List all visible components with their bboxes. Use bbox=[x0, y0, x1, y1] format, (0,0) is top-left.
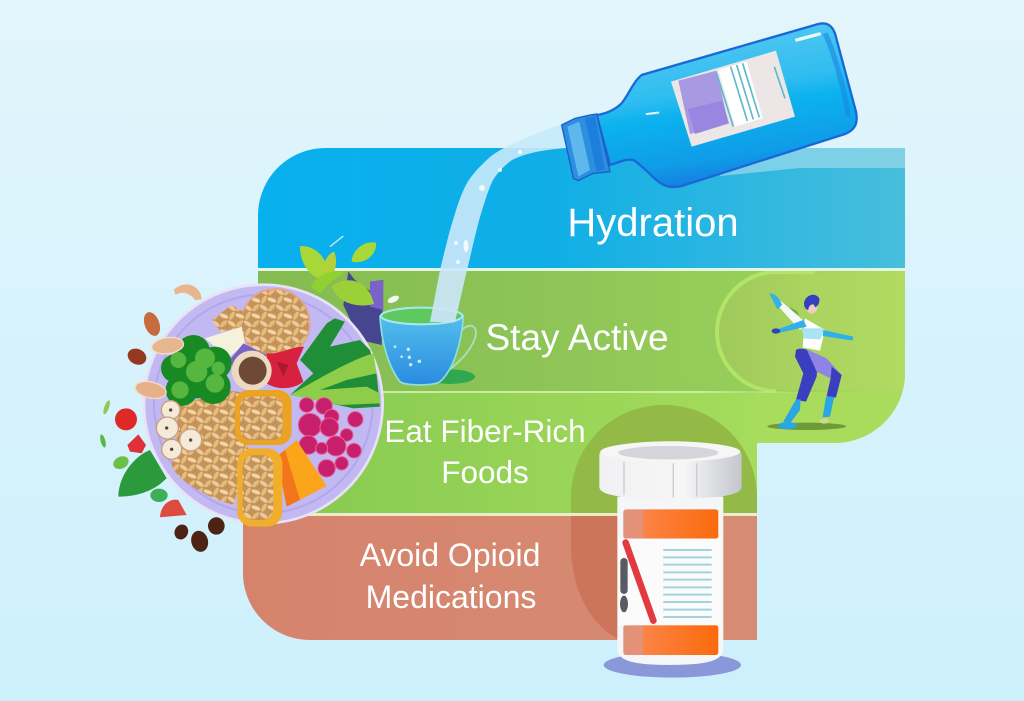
top orange stripe bbox=[623, 509, 718, 539]
top grain cup bbox=[235, 390, 292, 445]
icon: pill bottle bbox=[599, 441, 742, 678]
heading: Hydration: Hydration bbox=[567, 201, 739, 245]
heading: Avoid Opioid Medications: Medications bbox=[366, 579, 536, 615]
panel: avoid opioid medications band bbox=[243, 516, 757, 640]
heading: Eat Fiber-Rich Foods: Foods bbox=[441, 454, 529, 490]
arms bbox=[770, 293, 807, 330]
icon: food plate bbox=[144, 285, 383, 527]
heading: Eat Fiber-Rich Foods: Eat Fiber-Rich bbox=[384, 413, 586, 449]
red pepper bbox=[267, 347, 304, 388]
icon: teacup bbox=[380, 294, 476, 385]
icon: leaves and berries bbox=[300, 236, 383, 345]
arch behind dancer bbox=[717, 272, 905, 391]
panel: eat fiber-rich foods band bbox=[243, 393, 757, 513]
dancer shadow bbox=[767, 423, 846, 430]
panel: stay active lower strip bbox=[757, 392, 907, 444]
panel: stay active band bbox=[258, 271, 905, 443]
icon: dancer bbox=[767, 293, 853, 430]
bottle body bbox=[617, 497, 723, 665]
panel: dark arch behind pill bottle bbox=[571, 405, 757, 640]
grain bowl bbox=[241, 289, 310, 358]
purple wedge bbox=[228, 343, 267, 380]
bottle label bbox=[671, 51, 795, 147]
torso bbox=[803, 318, 825, 351]
panel: hydration band bbox=[258, 148, 905, 268]
bottle cap bbox=[562, 114, 610, 181]
small grains bbox=[212, 305, 243, 332]
plate bbox=[144, 285, 383, 523]
cap bbox=[599, 441, 742, 499]
medicine label bbox=[618, 539, 721, 625]
orange wedge bbox=[277, 440, 327, 507]
lower grain cup bbox=[237, 448, 282, 527]
left leg bbox=[795, 349, 818, 402]
wheat grains bbox=[172, 391, 248, 505]
right leg bbox=[807, 349, 842, 398]
heading: Stay Active: Stay Active bbox=[485, 317, 669, 358]
white vegetable bbox=[205, 327, 245, 358]
icon: scattered nuts, fruit and leaves bbox=[99, 285, 225, 554]
saucer shadow bbox=[425, 369, 475, 384]
berries bbox=[298, 398, 363, 477]
green stalks bbox=[290, 318, 380, 408]
head bbox=[806, 300, 817, 314]
shadow bbox=[604, 652, 741, 678]
icon: blue bottle bbox=[562, 23, 857, 187]
bottom orange stripe bbox=[623, 625, 718, 655]
broccoli bbox=[161, 335, 232, 406]
bottle body bbox=[597, 23, 857, 187]
water stream bbox=[430, 124, 565, 322]
mushrooms bbox=[156, 401, 202, 459]
heading: Avoid Opioid Medications: Avoid Opioid bbox=[360, 537, 540, 573]
fig bbox=[232, 351, 272, 391]
